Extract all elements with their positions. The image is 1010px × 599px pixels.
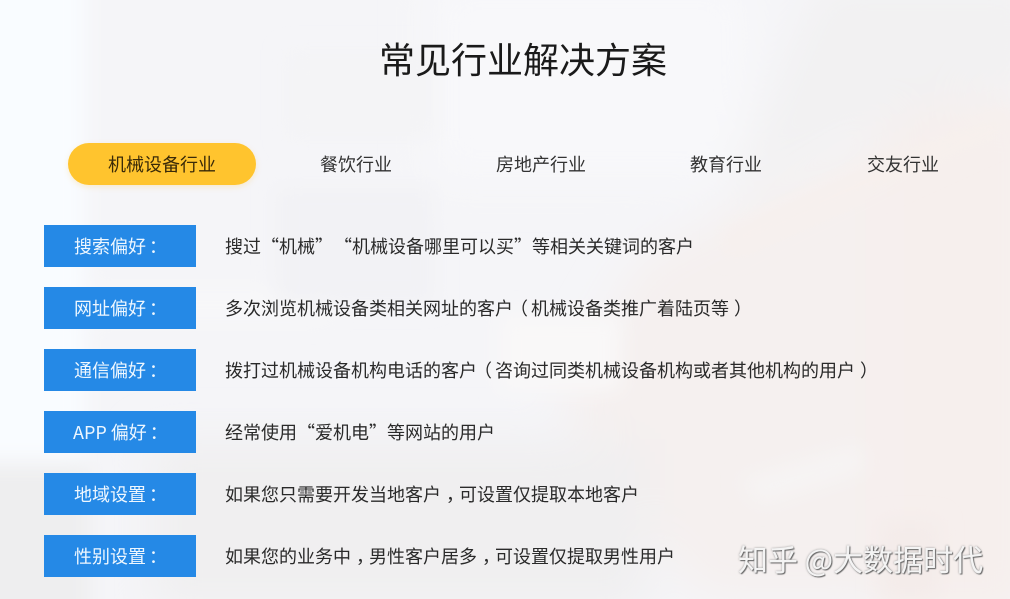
tab: active industry pill: [68, 143, 256, 185]
text: URL preference: 多次浏览机械设备类相关网址的客户（机械设备类推广着陆页等 ）: [225, 295, 752, 321]
tab: catering: 餐饮行业: [320, 151, 392, 177]
label: gender setting: 性别设置：: [74, 543, 167, 569]
label: search preference: 搜索偏好：: [74, 233, 167, 259]
watermark: 知乎 @大数据时代: [738, 536, 983, 580]
text: communication preference: 拨打过机械设备机构电话的客户（咨询过同类机械设备机构或者其他机构的用户 ）: [225, 357, 878, 383]
text: APP preference: 经常使用“爱机电”等网站的用户: [225, 419, 495, 445]
label: APP preference: [44, 411, 196, 453]
text: gender setting: 如果您的业务中 ，男性客户居多 ，可设置仅提取男性用户: [225, 543, 675, 569]
title: 常见行业解决方案: [379, 32, 667, 84]
label: URL preference: [44, 287, 196, 329]
label: gender setting: [44, 535, 196, 577]
label: search preference: [44, 225, 196, 267]
label: URL preference: 网址偏好：: [74, 295, 167, 321]
label: communication preference: 通信偏好：: [74, 357, 167, 383]
tab: education: 教育行业: [690, 151, 762, 177]
tab: active industry pill: 机械设备行业: [108, 151, 216, 177]
tab: real estate: 房地产行业: [496, 151, 586, 177]
label: APP preference: APP 偏好：: [73, 419, 168, 445]
text: region setting: 如果您只需要开发当地客户 ，可设置仅提取本地客户: [225, 481, 639, 507]
tab: dating: 交友行业: [867, 151, 939, 177]
text: search preference: 搜过“机械” “机械设备哪里可以买”等相关关键词的客户: [225, 233, 694, 259]
label: region setting: 地域设置：: [74, 481, 167, 507]
label: region setting: [44, 473, 196, 515]
label: communication preference: [44, 349, 196, 391]
